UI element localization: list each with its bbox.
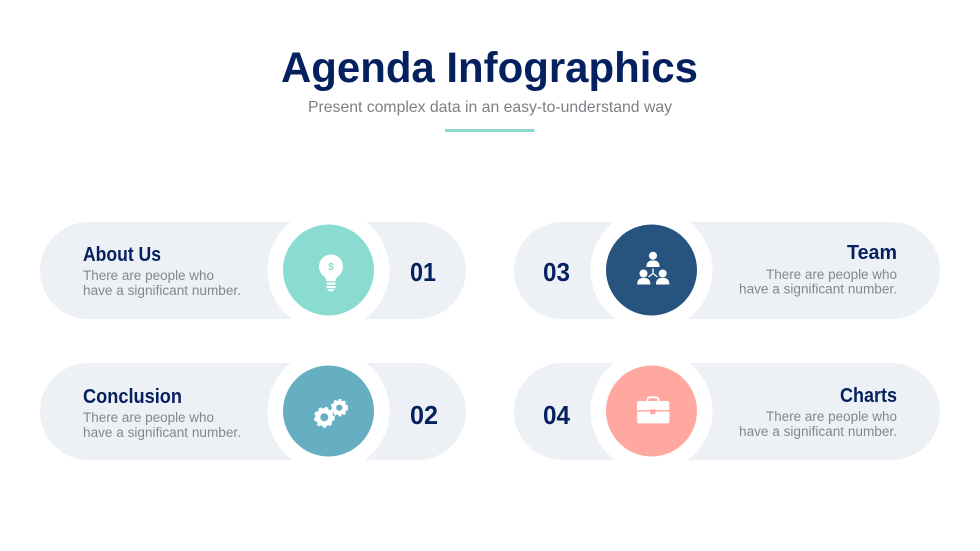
icon: lightbulb <box>283 224 374 316</box>
heading: team: Team <box>847 242 897 264</box>
icon: briefcase <box>606 366 697 456</box>
number 04: 04 <box>543 400 571 430</box>
title underline <box>445 129 534 132</box>
text: conclusion description: There are people who <box>83 410 214 425</box>
text: team description: have a significant number. <box>739 282 897 296</box>
text: about us description: have a significant number. <box>83 283 241 298</box>
icon: team hierarchy <box>606 224 697 316</box>
subtitle: Present complex data in an easy-to-understand way <box>308 99 672 116</box>
panel: team <box>514 209 940 331</box>
number 02: 02 <box>410 400 438 430</box>
icon: lightbulb: $ <box>328 262 334 273</box>
text: charts description <box>739 409 897 439</box>
panel: charts <box>514 350 940 472</box>
text: about us description <box>83 268 241 298</box>
heading: charts: Charts <box>840 385 897 407</box>
panel: conclusion <box>40 350 466 472</box>
heading: conclusion: Conclusion <box>83 386 182 408</box>
text: team description: There are people who <box>766 267 897 282</box>
text: conclusion description: have a significant number. <box>83 425 241 440</box>
text: conclusion description <box>83 410 241 440</box>
panel: about us <box>40 209 466 331</box>
title: Agenda Infographics <box>281 44 698 92</box>
heading: about us: About Us <box>83 244 161 266</box>
text: about us description: There are people who <box>83 268 214 283</box>
text: charts description: have a significant number. <box>739 424 897 439</box>
text: charts description: There are people who <box>766 409 897 424</box>
number 03: 03 <box>543 257 570 287</box>
text: team description <box>739 267 897 296</box>
icon: gears <box>283 366 374 456</box>
number 01: 01 <box>410 257 436 287</box>
